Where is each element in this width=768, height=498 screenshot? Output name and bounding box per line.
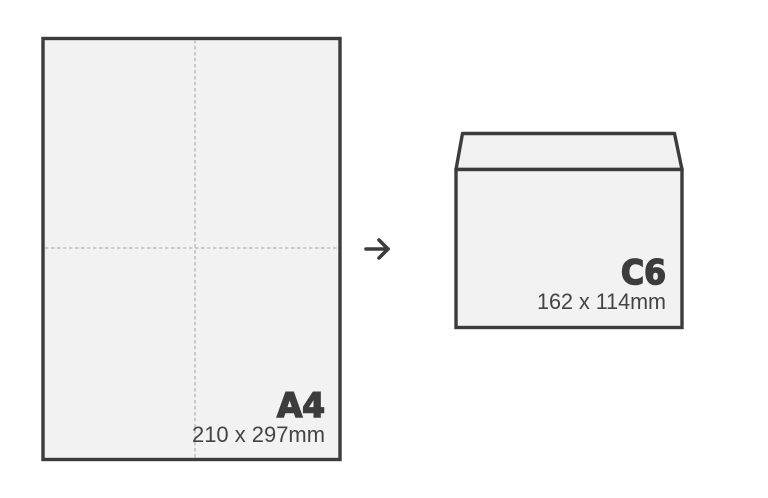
heading: A4: A4	[277, 386, 325, 426]
panel: C6 envelope	[456, 134, 682, 328]
panel: A4 sheet	[43, 38, 340, 460]
text: A4 dimensions: 210 x 297mm	[192, 422, 325, 447]
text: C6 dimensions: 162 x 114mm	[537, 289, 666, 314]
heading: C6: C6	[621, 253, 666, 293]
arrow	[366, 240, 388, 258]
